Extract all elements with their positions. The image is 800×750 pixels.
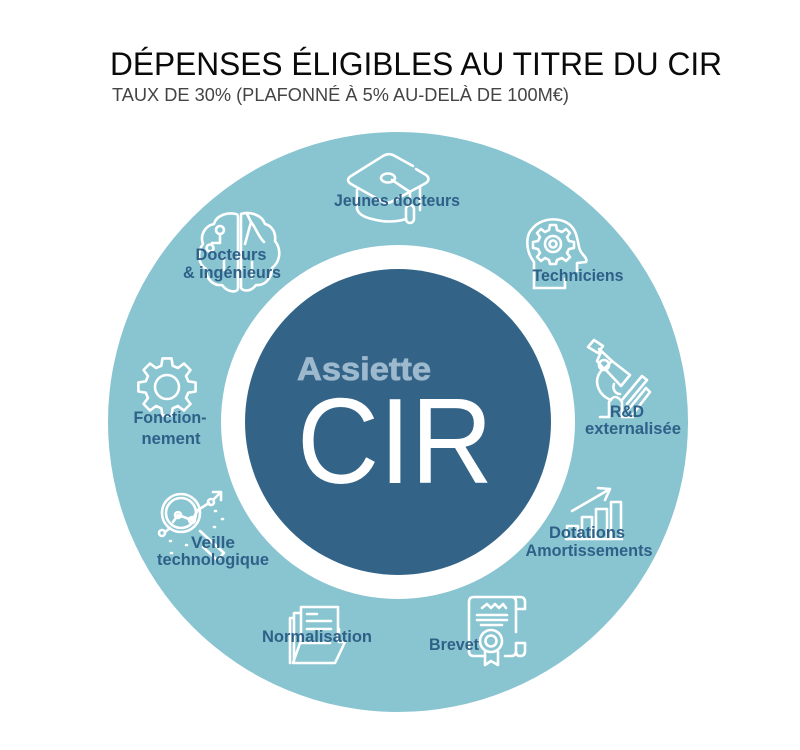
label: Normalisation: Normalisation bbox=[262, 627, 372, 646]
label: Fonctionnement: nement bbox=[142, 429, 201, 448]
label: Fonctionnement: Fonction- bbox=[134, 408, 206, 427]
icon: patent scroll bbox=[469, 597, 525, 665]
label: Dotations Amortissements bbox=[526, 523, 652, 560]
icon: microscope bbox=[588, 340, 650, 417]
label: Docteurs & ingénieurs bbox=[183, 245, 281, 282]
center label: Assiette: Assiette bbox=[297, 351, 431, 387]
icon: bar chart with arrow bbox=[566, 488, 622, 539]
label: Veille technologique: Veille bbox=[191, 533, 235, 552]
icon: head with gear bbox=[527, 219, 586, 288]
label: R&D externalisée: externalisée bbox=[585, 419, 681, 438]
panel: outer ring bbox=[108, 132, 688, 712]
label: Veille technologique bbox=[157, 533, 269, 569]
label: Dotations Amortissements: Dotations bbox=[549, 523, 625, 542]
label: R&D externalisée bbox=[585, 402, 681, 438]
center label: CIR: CIR bbox=[297, 373, 493, 509]
label: Techniciens: Techniciens bbox=[532, 266, 624, 285]
label: R&D externalisée: R&D bbox=[610, 402, 644, 421]
label: Jeunes docteurs: Jeunes docteurs bbox=[334, 191, 460, 210]
subtitle: TAUX DE 30% (PLAFONNÉ À 5% AU-DELÀ DE 100M€) bbox=[112, 85, 569, 105]
panel: white inner ring bbox=[221, 245, 575, 599]
label: Dotations Amortissements: Amortissements bbox=[526, 541, 652, 560]
label: Veille technologique: technologique bbox=[157, 550, 269, 569]
panel: central disc bbox=[245, 269, 551, 575]
icon: folder with papers bbox=[290, 607, 345, 663]
label: Fonctionnement bbox=[134, 408, 206, 448]
icon: gear bbox=[138, 358, 196, 416]
label: Docteurs & ingénieurs: Docteurs bbox=[196, 245, 266, 264]
label: Docteurs & ingénieurs: & ingénieurs bbox=[183, 263, 281, 282]
icon: graduation cap bbox=[348, 154, 428, 223]
icon: brain bbox=[199, 213, 279, 291]
title: DÉPENSES ÉLIGIBLES AU TITRE DU CIR bbox=[110, 46, 722, 82]
label: Brevet: Brevet bbox=[429, 635, 479, 654]
icon: magnifier with trend bbox=[159, 492, 224, 560]
